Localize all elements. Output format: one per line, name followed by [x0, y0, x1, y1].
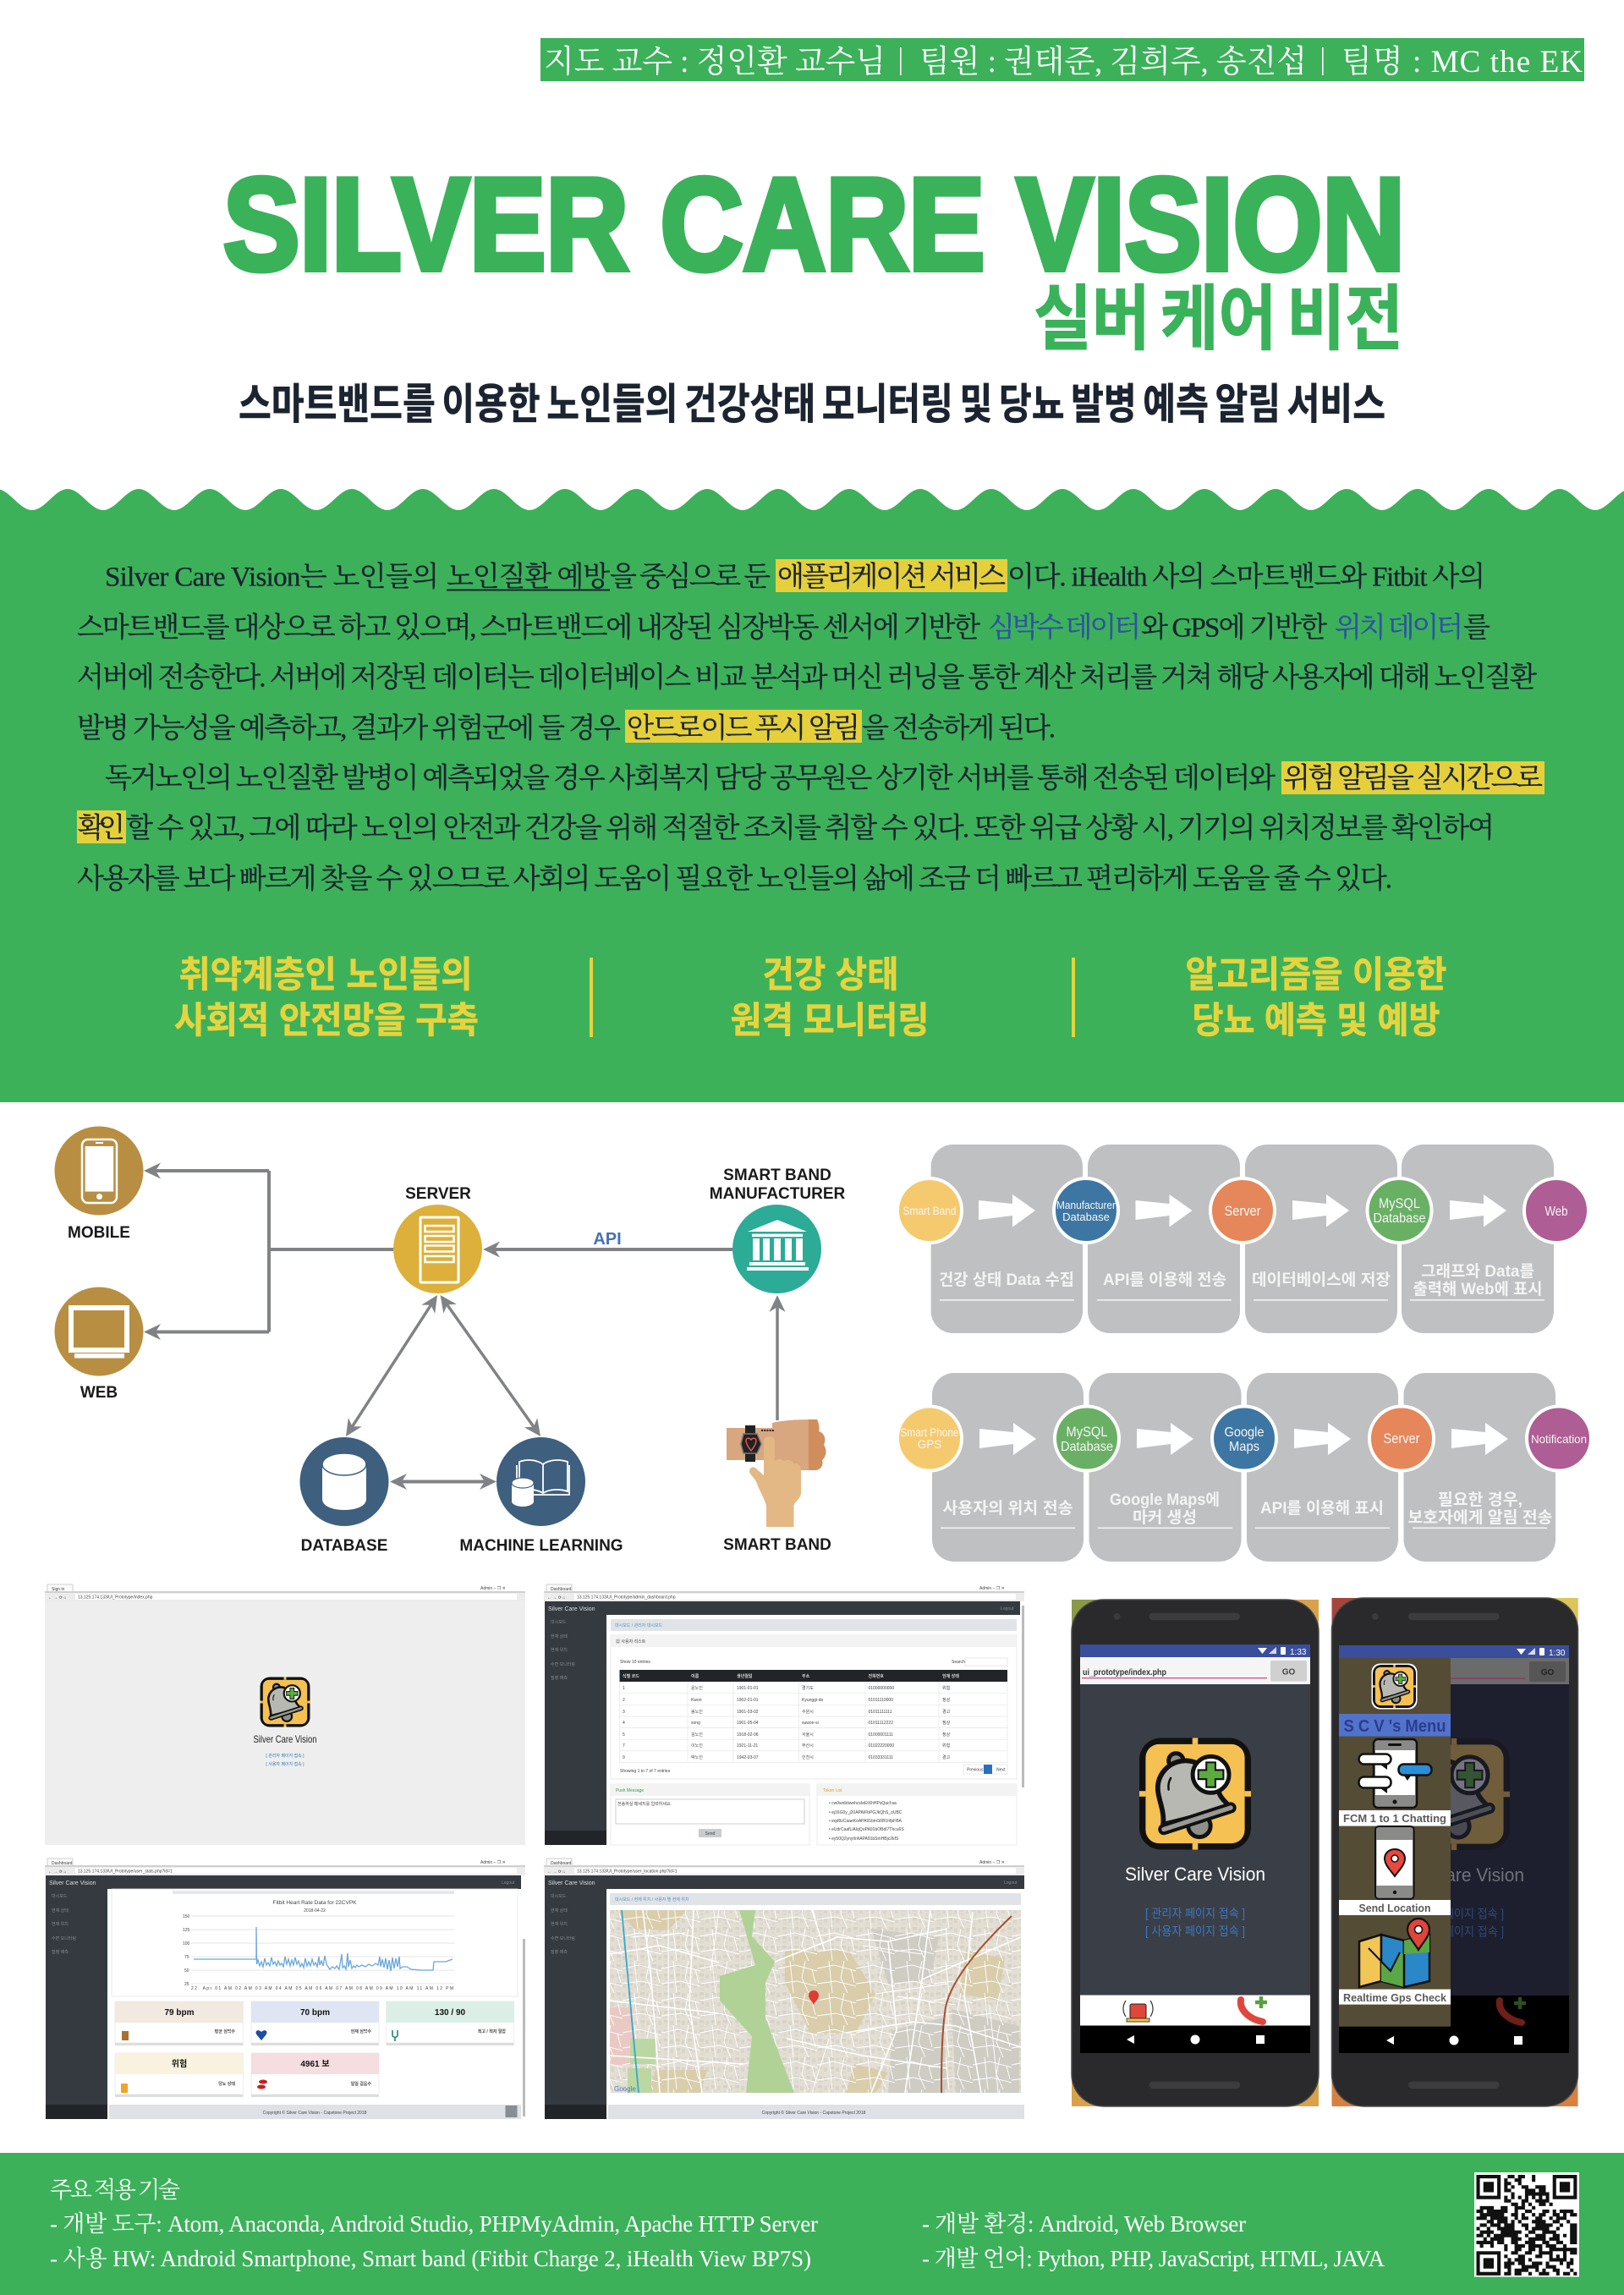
page links: [ 관리자 페이지 접속 ]	[1145, 1907, 1245, 1921]
description text: 와 GPS에 기반한	[1141, 612, 1327, 643]
icon: server	[393, 1205, 482, 1293]
heart rate chart: 50	[184, 1968, 189, 1974]
node labels: MySQL	[1066, 1424, 1108, 1440]
phone body	[1331, 1598, 1578, 2106]
icon: mobile	[54, 1127, 144, 1215]
screenshot: admin dashboard: Token List	[823, 1788, 842, 1793]
screenshot: user location map: 현재 상태	[551, 1908, 568, 1913]
address bar: ui_prototype/index.php	[1083, 1667, 1166, 1677]
user table: 경고	[942, 1709, 951, 1715]
screenshot: admin dashboard: • eqd9zCaaeKoAPA91bmS6B1hfpFBA	[829, 1819, 903, 1824]
app logo	[261, 1677, 310, 1727]
screenshot: admin dashboard: Search:	[952, 1660, 966, 1665]
user table: Kwon	[691, 1698, 702, 1703]
description text: 확인	[78, 812, 125, 844]
map: road texture	[610, 1910, 1021, 2093]
footer panel	[0, 2153, 1624, 2295]
description text	[77, 562, 1543, 895]
stat card: blood pressure: 130 / 90	[435, 2008, 466, 2018]
team info tag: 지도 교수 : 정인환 교수님	[544, 44, 886, 80]
arrows	[979, 1194, 1506, 1227]
user table: 서울시	[802, 1732, 814, 1738]
phone wallpaper corners	[1072, 1600, 1319, 2106]
stat card: daily steps	[251, 2053, 379, 2097]
node labels: Database	[1374, 1211, 1426, 1226]
key point: diabetes prediction: 알고리즘을 이용한	[1186, 946, 1446, 998]
subtitle: 스마트밴드를 이용한 노인들의 건강상태 모니터링 및 당뇨 발병 예측 알림 서비스	[239, 371, 1385, 431]
step captions: 사용자의 위치 전송	[942, 1499, 1073, 1518]
stat card: daily steps: 일일 걸음수	[351, 2081, 371, 2087]
user table: 1	[623, 1686, 625, 1691]
stat card: diabetes status: 위험	[172, 2056, 187, 2069]
screenshot: admin dashboard: Send	[705, 1831, 716, 1837]
screenshot: admin dashboard: 전송하실 메세지를 입력하세요.	[617, 1801, 672, 1807]
drawer menu: S C V 's Menu	[1343, 1717, 1446, 1736]
description text: 스마트밴드를 대상으로 하고 있으며, 스마트밴드에 내장된 심장박동 센서에 기반한	[77, 612, 980, 643]
label: server: SERVER	[405, 1185, 471, 1203]
nav bar	[1386, 2035, 1522, 2045]
icon: database	[299, 1437, 389, 1526]
arrows: connections	[151, 1171, 777, 1482]
screenshot: admin dashboard: 13.125.174.133/UI_Prototype/admin_dashboard.php	[577, 1595, 676, 1600]
label: manufacturer: SMART BAND	[723, 1167, 831, 1184]
description text: 심박수 데이터	[988, 612, 1141, 643]
heart rate chart: 150	[183, 1914, 190, 1919]
app name: Silver Care Vision	[1125, 1864, 1265, 1885]
user table: 01011111111	[868, 1710, 892, 1715]
phone body	[1072, 1600, 1319, 2106]
user table: 경고	[942, 1754, 951, 1760]
key point: social safety net: 사회적 안전망을 구축	[174, 991, 479, 1044]
label: manufacturer: MANUFACTURER	[710, 1185, 845, 1203]
user table: 1918-02-06	[737, 1732, 759, 1738]
screenshot: user location map: 현재 위치	[551, 1921, 568, 1927]
screenshot: admin dashboard: Admin – ❐ ✕	[979, 1586, 1005, 1591]
menu label: chatting	[1339, 1810, 1451, 1826]
description text: 안드로이드 푸시 알림	[627, 712, 860, 744]
label: database: DATABASE	[301, 1537, 387, 1555]
stat card: blood pressure	[387, 2001, 514, 2045]
screenshot: admin dashboard: • eUdrCaafLiAIqQoPA91bOBdI7Thcu6S	[829, 1827, 904, 1832]
panel: green description	[0, 489, 1624, 1102]
node labels: Web	[1544, 1205, 1568, 1219]
icon: smart band on wrist	[727, 1419, 826, 1527]
user table: 수원시	[802, 1709, 814, 1715]
screenshot: user location map: Dashboard	[551, 1861, 572, 1866]
icon: gps map	[1359, 1919, 1429, 1987]
user table: 위험	[942, 1743, 950, 1749]
user table: 01022220000	[868, 1743, 894, 1749]
description text: 을 전송하게 된다.	[862, 712, 1056, 744]
description text: 노인질환 예방	[447, 562, 610, 592]
user table: 식별 코드	[623, 1673, 639, 1679]
footer heading: 주요 적용 기술	[50, 2177, 180, 2203]
user table: 01033331111	[868, 1755, 893, 1760]
heart rate chart: 100	[183, 1941, 190, 1946]
user table: 1901-03-02	[737, 1710, 759, 1715]
step captions: 보호자에게 알림 전송	[1407, 1508, 1553, 1527]
map: green park	[720, 1910, 794, 2093]
icon: manufacturer building	[732, 1205, 821, 1293]
node labels: Database	[1062, 1211, 1110, 1223]
label: mobile: MOBILE	[68, 1224, 130, 1242]
user table: 4	[623, 1721, 625, 1726]
map	[610, 1910, 1021, 2093]
screenshot: sign-in page: ← → ⟳ ⌂	[48, 1595, 66, 1600]
user table: 정상	[942, 1732, 951, 1738]
heart rate chart: 22. Apr 01 AM 02 AM 03 AM 04 AM 05 AM 06 AM 07 AM 08 AM 09 AM 10 AM 11 AM 12 PM	[191, 1986, 453, 1991]
node labels: Smart Band	[903, 1205, 956, 1217]
team info tag: 팀명 : MC the EK	[1341, 44, 1583, 80]
address bar: GO	[1282, 1668, 1295, 1677]
key point: remote monitoring: 건강 상태	[763, 946, 898, 998]
stat card: average heart rate: 평균 심박수	[215, 2029, 235, 2034]
description text: 이다. iHealth 사의 스마트밴드와 Fitbit 사의	[1007, 562, 1485, 592]
screenshot: user health status: 13.125.174.133/UI_Prototype/user_stats.php?id=1	[78, 1869, 173, 1875]
phone: main screen	[1072, 1600, 1319, 2106]
screenshot: user location map: 13.125.174.133/UI_Prototype/user_location.php?id=1	[577, 1869, 678, 1875]
screenshot: user health status: 현재 상태	[52, 1908, 69, 1913]
dimmed screen: Silver Care Vision	[1384, 1864, 1524, 1886]
stat card: blood pressure: 최고 / 최저 혈압	[478, 2029, 506, 2034]
step captions: Google Maps에	[1110, 1491, 1220, 1509]
QR code	[1474, 2172, 1579, 2277]
screenshot: admin dashboard: Silver Care Vision	[548, 1606, 595, 1612]
heart rate chart: 25	[184, 1982, 189, 1987]
screenshot: user location map: 대시보드 / 현재 위치 / 사용자 별 현재 위치	[615, 1897, 689, 1902]
icon: send location	[1375, 1826, 1414, 1899]
stat card: diabetes status: 당뇨 상태	[218, 2081, 235, 2087]
user table: 2	[623, 1698, 625, 1703]
drawer menu: FCM 1 to 1 Chatting	[1343, 1812, 1446, 1825]
key point: diabetes prediction	[1186, 946, 1446, 1044]
screenshot: user health status: Dashboard	[52, 1861, 73, 1866]
description text: 위험 알림을 실시간으로	[1283, 763, 1543, 793]
screenshot: user location map	[544, 1859, 1024, 2119]
footer: tools: - 개발 도구: Atom, Anaconda, Android Studio, PHPMyAdmin, Apache HTTP Server	[50, 2211, 818, 2237]
screenshot: user health status: 대시보드	[52, 1893, 68, 1899]
wave background	[0, 489, 1624, 1102]
user table: 1942-03-07	[737, 1755, 759, 1760]
heart rate chart: 75	[184, 1955, 189, 1960]
action bar	[1080, 1995, 1310, 2025]
user table: 윤노인	[691, 1685, 703, 1691]
screenshot: admin dashboard: Next	[996, 1768, 1006, 1773]
dimmed screen: [ 관리자 페이지 접속 ]	[1404, 1907, 1504, 1922]
screenshot: sign-in page: 13.125.174.133/UI_Prototype/index.php	[78, 1595, 153, 1600]
description text: 서버에 전송한다. 서버에 저장된 데이터는 데이터베이스 비교 분석과 머신 러닝을 통한 계산 처리를 거쳐 해당 사용자에 대해 노인질환	[77, 662, 1537, 694]
user table: 3	[623, 1710, 625, 1715]
step captions: API를 이용해 전송	[1103, 1271, 1226, 1289]
step captions: 필요한 경우,	[1438, 1491, 1522, 1509]
node labels: Google	[1225, 1425, 1265, 1440]
screenshot: sign-in page: [ 관리자 페이지 접속 ]	[266, 1753, 304, 1759]
screenshot: admin dashboard: • cw0wnbtiwehcsIeEtXhHPsQacf:aa	[829, 1801, 897, 1806]
architecture diagram	[54, 1127, 845, 1555]
screenshot: admin dashboard: 현재 상태	[551, 1633, 568, 1639]
key point: diabetes prediction: 당뇨 예측 및 예방	[1193, 991, 1440, 1044]
description text: 발병 가능성을 예측하고, 결과가 위험군에 들 경우	[77, 712, 621, 744]
node labels: MySQL	[1379, 1195, 1420, 1211]
dimmed screen: GO	[1541, 1668, 1554, 1677]
map: pink district	[610, 2007, 633, 2065]
screenshot: sign-in page: [ 사용자 페이지 접속 ]	[266, 1761, 304, 1767]
user table: 박노인	[691, 1754, 703, 1760]
drawer menu: Realtime Gps Check	[1343, 1991, 1447, 2004]
key point: social safety net: 취약계층인 노인들의	[179, 946, 472, 998]
description text: 할 수 있고, 그에 따라 노인의 안전과 건강을 위해 적절한 조치를 취할 수 있다. 또한 위급 상황 시, 기기의 위치정보를 확인하여	[126, 812, 1495, 844]
step captions	[939, 1262, 1544, 1301]
node labels	[903, 1195, 1568, 1226]
user table: 1921-11-21	[737, 1743, 758, 1749]
step captions: 건강 상태 Data 수집	[939, 1271, 1074, 1289]
menu label: gps	[1339, 1990, 1451, 2005]
screenshot: user health status: 수면 모니터링	[52, 1935, 76, 1941]
screenshot: admin dashboard: 현재 위치	[551, 1647, 568, 1653]
screenshot: user health status: 현재 위치	[52, 1921, 69, 1927]
menu label: send location	[1339, 1900, 1451, 1915]
status bar	[1080, 1644, 1310, 1657]
map: Google	[614, 2085, 636, 2093]
key point: social safety net	[174, 946, 479, 1044]
drawer menu: Send Location	[1358, 1902, 1431, 1914]
user table: 전화번호	[868, 1673, 884, 1679]
label: manufacturer	[710, 1167, 845, 1203]
screenshot: admin dashboard: 질병 예측	[551, 1675, 568, 1681]
status bar: 1:30	[1549, 1649, 1566, 1658]
screenshot: user location map: Copyright © Silver Care Vision - Capstone Project 2018	[762, 2110, 866, 2116]
user table: 경기도	[802, 1685, 814, 1691]
description text: 위치 데이터	[1335, 612, 1463, 643]
screenshot: user location map: 대시보드	[551, 1893, 567, 1899]
screenshot: user health status	[45, 1859, 525, 2119]
screenshot: admin dashboard: • ey50Q2ynyIIrAAPA91bSmHBjc2kfS	[829, 1837, 899, 1842]
node labels: Maps	[1229, 1440, 1259, 1454]
screenshot: admin dashboard: Show 10 entries	[620, 1660, 650, 1665]
status bar: 1:33	[1290, 1648, 1307, 1657]
icon: chatting	[1358, 1739, 1431, 1808]
drawer menu	[1339, 1658, 1451, 2027]
user table: 송노인	[691, 1709, 703, 1715]
screenshot: user location map: ← → ⟳ ⌂	[547, 1869, 565, 1875]
description text: 를	[1463, 612, 1490, 643]
screenshot: user health status: Copyright © Silver Care Vision - Capstone Project 2018	[263, 2110, 367, 2116]
heart rate chart: 2018-04-22	[304, 1908, 326, 1913]
footer: language: - 개발 언어: Python, PHP, JavaScript, HTML, JAVA	[922, 2246, 1385, 2271]
screenshot: user location map: 질병 예측	[551, 1949, 568, 1955]
heart rate chart: 125	[183, 1928, 190, 1933]
screenshot: sign-in page: Admin – ❐ ✕	[480, 1586, 506, 1591]
highlights	[77, 559, 1544, 843]
user table: 01011112222	[868, 1721, 893, 1726]
screenshot: admin dashboard: Previous	[967, 1768, 984, 1773]
node labels: Smart Phone	[900, 1426, 959, 1439]
user table: 위험	[942, 1685, 950, 1691]
user table: 7	[623, 1743, 625, 1749]
drawer heading	[1339, 1714, 1451, 1736]
node labels	[900, 1424, 1587, 1454]
stat card: current heart rate: 현재 심박수	[351, 2029, 371, 2034]
user table: 01000000000	[868, 1686, 894, 1691]
label: smart band: SMART BAND	[723, 1536, 831, 1554]
user table: 김노인	[691, 1732, 703, 1738]
heart rate chart	[183, 1900, 455, 1991]
cards	[932, 1373, 1555, 1562]
screenshot: admin dashboard: Dashboard	[551, 1587, 572, 1592]
nav bar	[1080, 2025, 1310, 2053]
label: API: API	[593, 1230, 622, 1249]
heart rate chart: Fitbit Heart Rate Data for 22CVPK	[272, 1900, 357, 1906]
stat card: diabetes status	[115, 2053, 244, 2097]
page links	[1145, 1907, 1245, 1939]
description text: 사용자를 보다 빠르게 찾을 수 있으므로 사회의 도움이 필요한 노인들의 삶에 조금 더 빠르고 편리하게 도움을 줄 수 있다.	[77, 863, 1392, 895]
user table: 정상	[942, 1720, 951, 1726]
node labels: Manufacturer	[1056, 1199, 1116, 1211]
description text: 을 중심으로 둔	[610, 562, 771, 592]
status bar	[1339, 1645, 1569, 1658]
team info tag	[540, 38, 1584, 81]
screen	[1080, 1644, 1310, 2053]
user table: 부산시	[802, 1743, 814, 1749]
screenshot: admin dashboard: Logout	[1001, 1606, 1014, 1611]
map: location marker	[809, 1990, 819, 2005]
dimmed screen: [ 사용자 페이지 접속 ]	[1404, 1925, 1504, 1939]
footer: hardware: - 사용 HW: Android Smartphone, Smart band (Fitbit Charge 2, iHealth View BP7S)	[50, 2246, 811, 2271]
node labels: Server	[1225, 1203, 1261, 1219]
screenshot: user health status: ← → ⟳ ⌂	[48, 1869, 66, 1875]
user table: 1901-01-01	[737, 1686, 759, 1691]
label: machine learning: MACHINE LEARNING	[459, 1537, 623, 1555]
description text: Silver Care Vision는 노인들의	[105, 562, 439, 592]
node labels: Database	[1061, 1440, 1113, 1454]
nodes	[897, 1178, 1588, 1243]
user table: 생년월일	[737, 1673, 753, 1679]
screenshot: sign-in page: Silver Care Vision	[254, 1733, 316, 1745]
screenshot: admin dashboard: ← → ⟳ ⌂	[547, 1595, 565, 1600]
stat card: daily steps: 4961 보	[300, 2059, 330, 2069]
user table: 1902-01-01	[737, 1698, 759, 1703]
user table: 1901-05-04	[737, 1721, 759, 1726]
map: campus areas	[616, 1910, 1005, 2093]
cards	[931, 1145, 1554, 1333]
step captions: 그래프와 Data를	[1421, 1262, 1534, 1281]
page links: [ 사용자 페이지 접속 ]	[1145, 1924, 1245, 1939]
korean title: 실버 케어 비전	[1034, 262, 1403, 365]
user table: 현재 상태	[942, 1673, 959, 1679]
key point: remote monitoring: 원격 모니터링	[731, 991, 929, 1044]
map: built-up grey blocks	[871, 1929, 1019, 2093]
address bar	[1080, 1657, 1310, 1684]
user table: 이노인	[691, 1743, 703, 1749]
phone: side menu	[1331, 1598, 1578, 2106]
arrows	[979, 1423, 1508, 1455]
screenshot: admin dashboard	[544, 1584, 1024, 1845]
title: SILVER CARE VISION	[223, 151, 1405, 298]
step captions: 마커 생성	[1133, 1508, 1197, 1527]
step captions: 출력해 Web에 표시	[1413, 1280, 1543, 1298]
user table: Kyunggi-do	[802, 1698, 824, 1703]
stat card: average heart rate: 79 bpm	[164, 2008, 195, 2018]
process flow: location data	[897, 1373, 1591, 1562]
screenshot: admin dashboard: Showing 1 to 7 of 7 entries	[620, 1769, 671, 1774]
screenshot: admin dashboard: 대시보드 / 관리자 대시보드	[615, 1622, 663, 1628]
screenshot: sign-in page: Sign in	[52, 1587, 65, 1592]
process flow: health data	[897, 1145, 1588, 1333]
icon: machine learning	[497, 1437, 585, 1526]
screenshot: admin dashboard: Push Message	[616, 1788, 644, 1793]
node labels: GPS	[918, 1438, 941, 1451]
user table: song	[691, 1721, 700, 1726]
user table: 01011110000	[868, 1698, 893, 1703]
node labels: Notification	[1531, 1432, 1587, 1446]
drawer logo	[1372, 1663, 1418, 1709]
screenshot: user health status: Admin – ❐ ✕	[480, 1860, 506, 1865]
label: web: WEB	[80, 1384, 118, 1402]
screenshot: user health status: 질병 예측	[52, 1949, 69, 1955]
user table: 5	[623, 1732, 625, 1738]
user table: suwon-si	[802, 1721, 819, 1726]
screenshot: user location map: Silver Care Vision	[548, 1880, 595, 1886]
user table: 9	[623, 1755, 625, 1760]
user table: 01000001111	[868, 1732, 893, 1738]
screenshot: user location map: Logout	[1004, 1880, 1018, 1886]
user table: 인천시	[802, 1754, 814, 1760]
app logo	[1139, 1738, 1251, 1849]
user table	[619, 1670, 1007, 1763]
screenshot: user health status: Logout	[502, 1880, 515, 1886]
step captions: 데이터베이스에 저장	[1252, 1271, 1391, 1289]
stat card: current heart rate: 70 bpm	[300, 2008, 330, 2018]
nodes	[897, 1406, 1591, 1470]
stat card: current heart rate	[251, 2001, 379, 2045]
screenshot: admin dashboard: 대시보드	[551, 1619, 567, 1625]
user table: 정상	[942, 1697, 951, 1703]
icon: web	[54, 1288, 144, 1375]
stat card: average heart rate	[115, 2001, 244, 2045]
screenshot: sign-in page	[45, 1584, 525, 1845]
user table: 주소	[802, 1674, 810, 1679]
map: rail lines	[622, 1910, 639, 2093]
team info tag: 팀원 : 권태준, 김희주, 송진섭	[919, 44, 1307, 80]
node labels: Server	[1384, 1430, 1420, 1447]
screenshot: user health status: Silver Care Vision	[49, 1880, 96, 1886]
screenshot: user location map: Admin – ❐ ✕	[979, 1860, 1005, 1865]
screenshot: admin dashboard: ▦ 사용자 리스트	[616, 1639, 646, 1644]
step captions: API를 이용해 표시	[1260, 1499, 1384, 1518]
description text: 독거노인의 노인질환 발병이 예측되었을 경우 사회복지 담당 공무원은 상기한 서버를 통해 전송된 데이터와	[105, 763, 1276, 793]
footer: environment: - 개발 환경: Android, Web Browser	[922, 2211, 1246, 2237]
screenshot: admin dashboard: 수면 모니터링	[551, 1661, 575, 1667]
step captions	[941, 1491, 1553, 1529]
screenshot: user location map: 수면 모니터링	[551, 1935, 575, 1941]
map: roads	[610, 1910, 1021, 2093]
key point: remote monitoring	[731, 946, 929, 1044]
description text: 애플리케이션 서비스	[777, 562, 1006, 592]
phone wallpaper corners	[1331, 1598, 1578, 2106]
user table: 이름	[691, 1673, 700, 1679]
dimmed screen	[1339, 1645, 1569, 2053]
screenshot: admin dashboard: • ej16G0y_j20APAIFbPGJkQhS_oUBC	[829, 1810, 903, 1815]
